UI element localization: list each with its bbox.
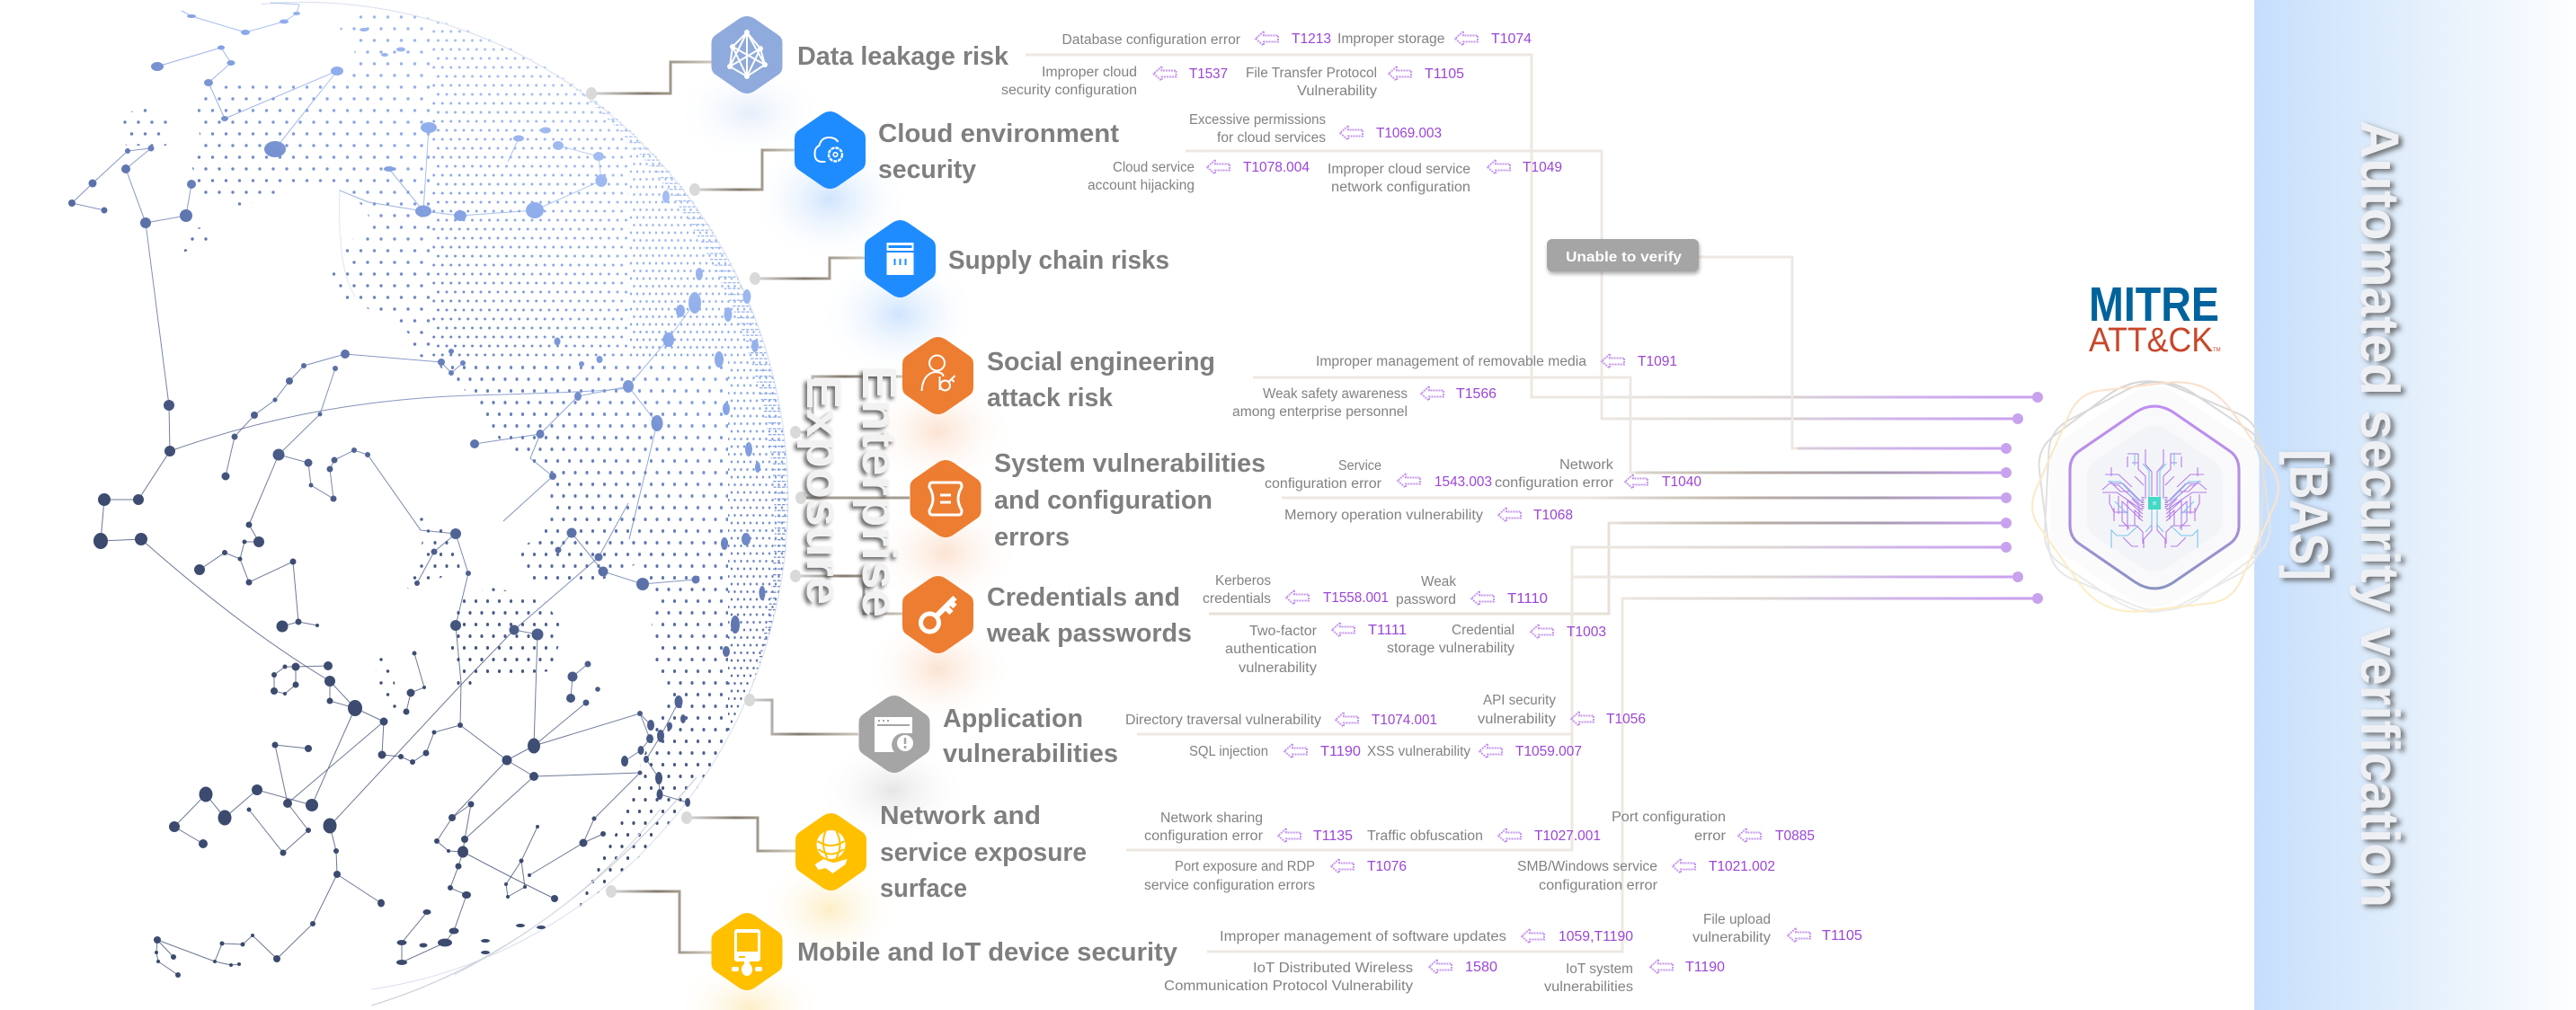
technique: file transfer protocol vulnerability: File Transfer Protocol xyxy=(1246,66,1377,81)
technique: database configuration error: T1213 xyxy=(1292,31,1331,47)
technique: weak safety awareness: among enterprise personnel xyxy=(1232,404,1408,420)
technique: directory traversal vulnerability xyxy=(1125,713,1437,728)
technique: weak password xyxy=(1396,574,1548,607)
network lines xyxy=(72,3,696,975)
connector: globe to credentials xyxy=(795,576,902,614)
verification trunk: system vulnerabilities xyxy=(1282,496,2006,500)
technique: file upload vulnerability: vulnerability xyxy=(1692,930,1771,945)
technique: SQL injection: T1190 xyxy=(1320,744,1361,759)
vertical title: Enterprise Exposure: Enterprise xyxy=(852,366,906,617)
technique: improper cloud security configuration xyxy=(1001,65,1228,98)
vertical title: Automated security verification [BAS] xyxy=(2278,120,2410,908)
technique: port exposure and RDP: Port exposure and RDP xyxy=(1175,859,1315,874)
technique: network sharing configuration error: Network sharing xyxy=(1160,811,1263,826)
icon: AI brain hexagon xyxy=(2004,342,2306,651)
logo: MITRE ATT&CK xyxy=(2089,278,2221,359)
vertical title: Automated security verification [BAS]: [BAS] xyxy=(2278,449,2339,580)
heading: surface xyxy=(880,874,967,903)
icon: bug chip xyxy=(910,460,982,537)
connector: globe to cloud environment security xyxy=(695,150,795,190)
technique: kerberos credentials: T1558.001 xyxy=(1323,590,1389,606)
icon: globe in hand xyxy=(795,813,866,890)
technique: SMB/Windows service xyxy=(1517,859,1775,893)
technique: service configuration error: configuration error xyxy=(1265,476,1381,492)
technique: kerberos credentials: credentials xyxy=(1203,591,1271,607)
technique: excessive permissions xyxy=(1189,112,1442,146)
connector: globe to mobile and IoT xyxy=(611,891,712,952)
heading: Network and xyxy=(880,802,1041,830)
technique: excessive permissions: Excessive permissions xyxy=(1189,112,1326,128)
risk: cloud environment xyxy=(795,111,1119,189)
technique: SMB/Windows service: T1021.002 xyxy=(1709,859,1775,874)
technique: IoT system vulnerabilities: vulnerabilities xyxy=(1544,979,1633,995)
risk: social engineering xyxy=(902,337,1215,414)
technique: software updates: 1059,T1190 xyxy=(1559,929,1633,944)
technique: improper cloud service network configuration xyxy=(1328,160,1562,195)
vertical title: Enterprise Exposure xyxy=(796,366,906,617)
icon: person with key xyxy=(902,337,973,414)
globe outline and meridians xyxy=(261,3,788,1006)
technique: XSS vulnerability xyxy=(1367,744,1582,759)
technique: network sharing configuration error: T1135 xyxy=(1313,828,1353,844)
technique: IoT system vulnerabilities: IoT system xyxy=(1566,961,1633,977)
technique: credential storage vulnerability: Credential xyxy=(1452,623,1515,638)
icon: network mesh xyxy=(712,16,782,93)
technique: cloud service account hijacking xyxy=(1088,160,1310,193)
technique: file transfer protocol vulnerability: Vulnerability xyxy=(1297,84,1377,99)
logo: MITRE ATT&CK: MITRE xyxy=(2089,278,2219,332)
verification trunk: credentials xyxy=(1209,523,2006,614)
connector nodes on globe edge xyxy=(586,87,806,898)
icon: browser window with alert xyxy=(859,695,929,773)
heading: Credentials and xyxy=(987,583,1180,612)
connector: globe to supply chain risks xyxy=(755,258,865,279)
verification trunk: unable to verify xyxy=(1699,257,2006,448)
technique: port configuration error: Port configuration xyxy=(1612,810,1726,825)
heading: attack risk xyxy=(987,384,1114,412)
connector: globe to data leakage risk xyxy=(591,62,712,93)
connector: globe to social engineering xyxy=(795,377,902,432)
icon: connected device xyxy=(712,913,782,990)
heading: Mobile and IoT device security xyxy=(797,938,1177,967)
icon: cloud with gear xyxy=(795,111,866,189)
technique: network configuration error: T1040 xyxy=(1662,474,1701,490)
verification trunk: data leakage xyxy=(1026,55,2038,397)
technique: IoT wireless protocol: 1580 xyxy=(1465,960,1497,975)
technique: SMB/Windows service: configuration error xyxy=(1539,878,1657,893)
technique: two-factor authentication vulnerability xyxy=(1225,623,1407,676)
technique: two-factor authentication vulnerability: vulnerability xyxy=(1239,660,1317,676)
inner hexagon xyxy=(2087,426,2222,571)
technique: directory traversal vulnerability: T1074.001 xyxy=(1372,713,1437,728)
technique: port configuration error: error xyxy=(1694,828,1726,844)
technique: API security vulnerability: API security xyxy=(1483,693,1556,708)
technique: traffic obfuscation: Traffic obfuscation xyxy=(1367,828,1483,844)
connector: globe to network exposure xyxy=(687,818,795,851)
connector: globe to system vulnerabilities xyxy=(801,496,910,500)
risk: network and service exposure xyxy=(795,802,1087,903)
technique: memory operation vulnerability: T1068 xyxy=(1533,508,1573,523)
technique: XSS vulnerability: XSS vulnerability xyxy=(1367,744,1470,759)
technique: service configuration error xyxy=(1265,458,1492,492)
technique: SQL injection: SQL injection xyxy=(1189,744,1268,759)
technique: port exposure and RDP: T1076 xyxy=(1367,859,1407,874)
technique: database configuration error xyxy=(1062,31,1331,48)
technique: memory operation vulnerability: Memory operation vulnerability xyxy=(1284,508,1483,523)
technique: IoT wireless protocol xyxy=(1164,960,1497,994)
verification trunk: network xyxy=(1126,577,2018,850)
technique: software updates xyxy=(1220,929,1633,944)
technique: excessive permissions: T1069.003 xyxy=(1376,126,1442,141)
logo: MITRE ATT&CK: TM xyxy=(2213,348,2221,353)
verification trunk: application xyxy=(1137,547,2006,734)
technique: IoT system vulnerabilities xyxy=(1544,960,1725,995)
technique: port configuration error xyxy=(1612,810,1815,844)
verification trunk: mobile xyxy=(1207,598,2038,952)
trunk end bullets xyxy=(2001,392,2043,604)
callout: unable to verify: Unable to verify xyxy=(1566,250,1682,265)
technique: network configuration error xyxy=(1495,457,1701,491)
verification trunk: cloud xyxy=(1186,151,2018,419)
technique: weak password: T1110 xyxy=(1507,591,1548,607)
technique: SQL injection xyxy=(1189,744,1361,759)
technique: network sharing configuration error: configuration error xyxy=(1144,828,1263,844)
heading: errors xyxy=(994,523,1070,552)
technique: file upload vulnerability: File upload xyxy=(1703,912,1771,927)
heading: System vulnerabilities xyxy=(994,449,1266,478)
icon: archive box xyxy=(865,220,936,297)
risk: data leakage xyxy=(712,16,1009,93)
technique: weak password: password xyxy=(1396,592,1456,607)
heading: Supply chain risks xyxy=(948,246,1169,275)
technique: XSS vulnerability: T1059.007 xyxy=(1515,744,1582,759)
technique: weak safety awareness: Weak safety awareness xyxy=(1263,386,1408,402)
circuit brain xyxy=(2102,449,2207,548)
technique: removable media: Improper management of removable media xyxy=(1316,354,1586,369)
risk: credentials xyxy=(902,576,1192,653)
risk: supply chain xyxy=(865,220,1169,297)
icon: key xyxy=(902,576,973,653)
technique: traffic obfuscation xyxy=(1367,828,1601,844)
technique: cloud service account hijacking: Cloud service xyxy=(1113,160,1195,175)
heading: and configuration xyxy=(994,486,1212,515)
technique: cloud service account hijacking: account hijacking xyxy=(1088,178,1195,193)
technique: weak safety awareness xyxy=(1232,386,1497,420)
technique: API security vulnerability: T1056 xyxy=(1606,712,1646,727)
technique: improper cloud service network configuration: network configuration xyxy=(1331,180,1470,195)
technique: improper cloud security configuration: security configuration xyxy=(1001,83,1137,98)
heading: Social engineering xyxy=(987,348,1215,377)
technique: removable media: T1091 xyxy=(1638,354,1677,369)
technique: weak password: Weak xyxy=(1421,574,1456,589)
technique: IoT wireless protocol: Communication Protocol Vulnerability xyxy=(1164,979,1413,994)
technique: memory operation vulnerability xyxy=(1284,508,1573,523)
technique: API security vulnerability: vulnerability xyxy=(1478,712,1556,727)
heading: vulnerabilities xyxy=(943,740,1118,768)
technique: SMB/Windows service: SMB/Windows service xyxy=(1517,859,1657,874)
technique: network configuration error: Network xyxy=(1559,457,1613,473)
technique: network configuration error: configuration error xyxy=(1495,475,1613,491)
panel: automated verification background xyxy=(2254,0,2576,1010)
technique: kerberos credentials: Kerberos xyxy=(1215,573,1271,589)
heading: Application xyxy=(943,704,1083,733)
technique: two-factor authentication vulnerability: T1111 xyxy=(1368,623,1407,638)
risk: system vulnerabilities xyxy=(910,449,1266,552)
soft outer hexagon xyxy=(2049,386,2260,607)
technique: traffic obfuscation: T1027.001 xyxy=(1534,828,1601,844)
heading: service exposure xyxy=(880,838,1087,867)
technique: improper cloud security configuration: T1537 xyxy=(1189,66,1228,82)
heading: security xyxy=(878,155,976,184)
technique: file upload vulnerability xyxy=(1692,912,1862,945)
technique: cloud service account hijacking: T1078.004 xyxy=(1243,160,1310,175)
technique: improper cloud security configuration: Improper cloud xyxy=(1042,65,1137,80)
technique: improper storage: T1074 xyxy=(1491,31,1532,47)
technique: weak safety awareness: T1566 xyxy=(1456,386,1497,402)
technique: credential storage vulnerability: T1003 xyxy=(1567,625,1606,640)
technique: improper storage xyxy=(1337,31,1532,47)
vertical title: Automated security verification [BAS]: Automated security verification xyxy=(2349,120,2410,908)
technique: port configuration error: T0885 xyxy=(1775,828,1815,844)
globe with dotted world map and network constellation xyxy=(68,0,818,1010)
technique: service configuration error: 1543.003 xyxy=(1435,474,1492,490)
risk: mobile and IoT xyxy=(712,913,1177,990)
technique: file transfer protocol vulnerability xyxy=(1246,66,1464,99)
technique: credential storage vulnerability xyxy=(1387,623,1606,656)
technique: IoT wireless protocol: IoT Distributed Wireless xyxy=(1253,961,1413,976)
globe dotted land xyxy=(123,15,787,906)
technique: port exposure and RDP: service configuration errors xyxy=(1144,878,1315,893)
technique: improper cloud service network configuration: T1049 xyxy=(1523,160,1562,175)
technique: improper cloud service network configuration: Improper cloud service xyxy=(1328,162,1470,177)
technique: kerberos credentials xyxy=(1203,573,1389,607)
technique: network sharing configuration error xyxy=(1144,811,1353,844)
logo: MITRE ATT&CK: ATT&CK xyxy=(2089,322,2213,359)
technique: file transfer protocol vulnerability: T1105 xyxy=(1425,66,1464,82)
technique: credential storage vulnerability: storage vulnerability xyxy=(1387,641,1515,656)
purple hexagon xyxy=(2070,406,2239,589)
technique: file upload vulnerability: T1105 xyxy=(1822,928,1862,944)
technique: database configuration error: Database configuration error xyxy=(1062,32,1240,48)
technique: two-factor authentication vulnerability: authentication xyxy=(1225,642,1317,657)
technique: port exposure and RDP xyxy=(1144,859,1407,893)
heading: Cloud environment xyxy=(878,120,1119,148)
verification trunk: social engineering xyxy=(1253,377,2006,473)
technique: software updates: Improper management of software updates xyxy=(1220,929,1506,944)
technique: excessive permissions: for cloud services xyxy=(1217,130,1326,146)
heading: Data leakage risk xyxy=(797,42,1009,71)
technique: improper storage: Improper storage xyxy=(1337,31,1445,47)
technique: service configuration error: Service xyxy=(1338,458,1381,474)
risk: application vulnerabilities xyxy=(859,695,1118,773)
technique: two-factor authentication vulnerability: Two-factor xyxy=(1249,624,1317,639)
callout: unable to verify xyxy=(1547,239,1699,271)
wavy rings xyxy=(2004,342,2306,651)
network nodes xyxy=(68,12,766,978)
background colour glows xyxy=(673,63,1021,1010)
technique: IoT system vulnerabilities: T1190 xyxy=(1685,960,1725,975)
technique: API security vulnerability xyxy=(1478,693,1646,727)
heading: weak passwords xyxy=(986,619,1192,648)
vertical title: Enterprise Exposure: Exposure xyxy=(796,376,850,605)
globe limb latitude stripes xyxy=(562,77,787,687)
technique: directory traversal vulnerability: Directory traversal vulnerability xyxy=(1125,713,1321,728)
connector: globe to application vulnerabilities xyxy=(750,700,858,734)
